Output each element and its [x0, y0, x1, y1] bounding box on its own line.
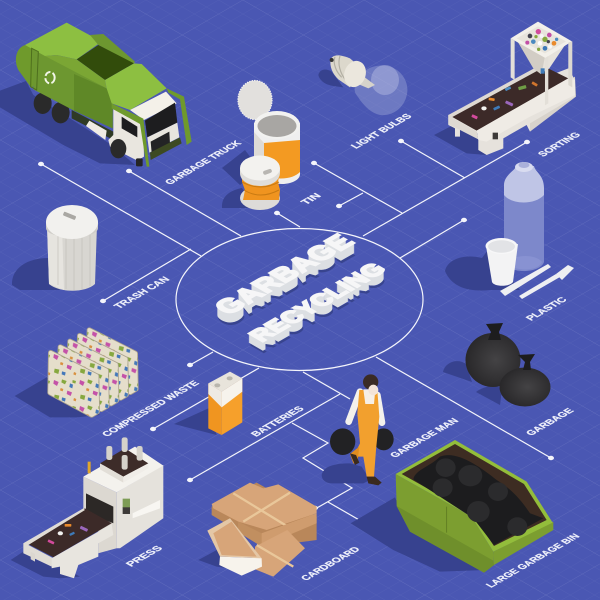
label: GARBAGE TRUCK: GARBAGE TRUCK: [163, 139, 245, 187]
icon: battery: [174, 372, 242, 435]
icon: plastic bottle, cup and cutlery: [445, 162, 574, 299]
label: CARDBOARD: CARDBOARD: [299, 545, 363, 583]
label: COMPRESSED WASTE: COMPRESSED WASTE: [100, 379, 203, 439]
icon: large garbage bin: [351, 440, 553, 573]
icon: light bulb: [318, 55, 407, 115]
label: PRESS: PRESS: [124, 544, 166, 569]
icon: trash can: [12, 205, 98, 291]
label: BATTERIES: BATTERIES: [249, 405, 307, 439]
icon: garbage truck: [0, 23, 192, 167]
icon: garbage bags: [443, 323, 550, 406]
icon: small crushed can: [222, 156, 280, 210]
icon: press machine: [11, 437, 163, 578]
label: GARBAGE MAN: GARBAGE MAN: [388, 417, 462, 460]
connector end dots: [38, 139, 554, 546]
icon: compressed waste bale: [15, 330, 136, 417]
label: GARBAGE: GARBAGE: [524, 407, 577, 438]
label: SORTING: SORTING: [536, 131, 584, 159]
icon: tin lid and can: [222, 80, 300, 185]
flowchart connector lines: [41, 141, 551, 544]
title: RECYCLING: RECYCLING: [243, 259, 393, 346]
icon: cardboard boxes: [198, 483, 317, 577]
label: LIGHT BULBS: LIGHT BULBS: [349, 112, 415, 151]
label: TIN: TIN: [299, 192, 324, 207]
icon: sorting conveyor: [434, 22, 576, 155]
icon: garbage man: [322, 374, 394, 485]
label: LARGE GARBAGE BIN: LARGE GARBAGE BIN: [484, 532, 583, 590]
title: GARBAGE: GARBAGE: [207, 230, 361, 318]
label: PLASTIC: PLASTIC: [524, 296, 570, 323]
label: TRASH CAN: TRASH CAN: [112, 275, 173, 311]
